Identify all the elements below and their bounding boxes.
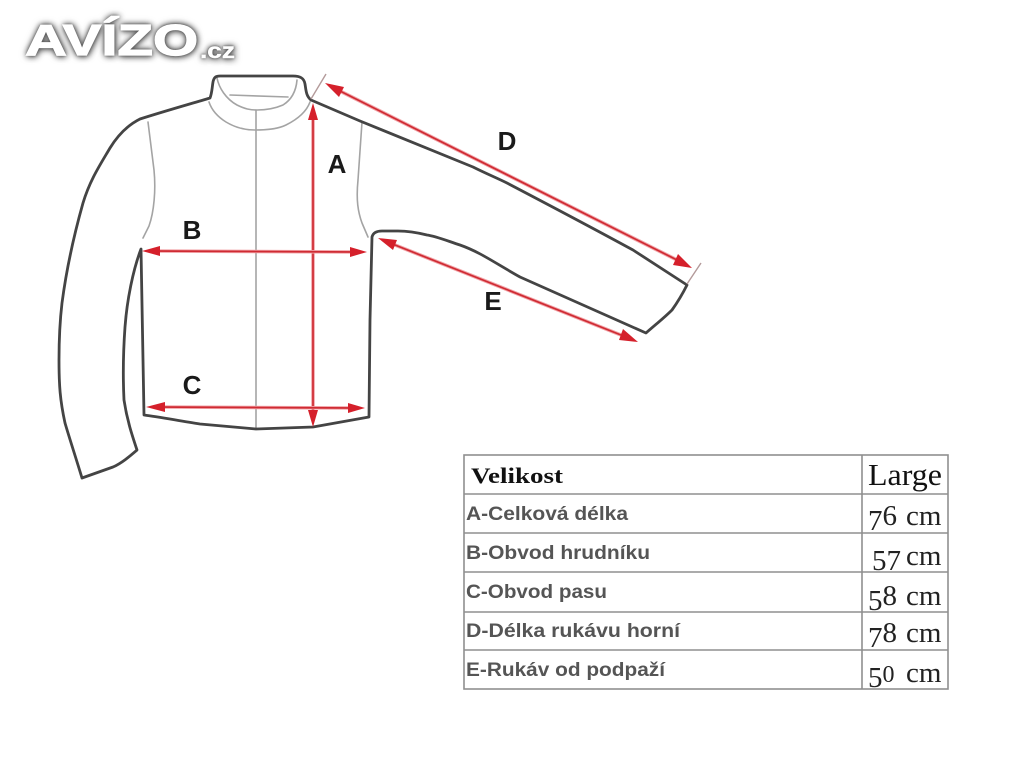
row values: [868, 500, 942, 694]
row values: cm: [906, 580, 942, 612]
diagram letters: D: [498, 126, 516, 156]
arrow B: chest: [142, 246, 367, 257]
bold outer contour: [59, 76, 687, 478]
jacket outline drawing: [59, 76, 687, 478]
row labels: D-Délka rukávu horní: [466, 621, 681, 642]
row labels: A-Celková délka: [466, 504, 628, 525]
row values: 7: [868, 622, 882, 654]
diagram letters: A: [328, 149, 347, 179]
row labels: E-Rukáv od podpaží: [466, 660, 666, 681]
size table: [464, 455, 948, 694]
header row: [471, 457, 942, 492]
row values: 7: [868, 505, 882, 537]
row values: cm: [906, 657, 942, 689]
row values: 5: [868, 585, 882, 617]
row values: 8: [882, 617, 897, 649]
row values: cm: [906, 500, 942, 532]
row labels: B-Obvod hrudníku: [466, 543, 650, 564]
header row: Velikost: [471, 463, 564, 488]
row values: 6: [882, 500, 897, 532]
header row: Large: [868, 457, 942, 492]
row values: cm: [906, 540, 942, 572]
arrow E: sleeve from armpit: [378, 238, 638, 342]
row values: cm: [906, 617, 942, 649]
arrow A: total length: [308, 103, 318, 427]
diagram letters: C: [183, 370, 202, 400]
diagram letters: [183, 126, 516, 400]
row values: 8: [882, 580, 897, 612]
arrow D: upper sleeve length: [325, 83, 692, 268]
logo: Avízo.cz: .cz: [200, 40, 235, 63]
row values: 0: [882, 662, 894, 688]
arrow C: waist: [146, 402, 365, 413]
table grid: [464, 455, 948, 689]
diagram letters: E: [484, 286, 502, 316]
row values: 57: [872, 545, 901, 577]
measurement end ticks: [311, 74, 701, 284]
logo: Avízo.cz: AVÍZO: [25, 16, 198, 65]
diagram letters: B: [183, 215, 201, 245]
thin inner seams: [143, 78, 368, 429]
row values: 5: [868, 662, 882, 694]
row labels: C-Obvod pasu: [466, 582, 607, 603]
row labels: [466, 504, 681, 681]
